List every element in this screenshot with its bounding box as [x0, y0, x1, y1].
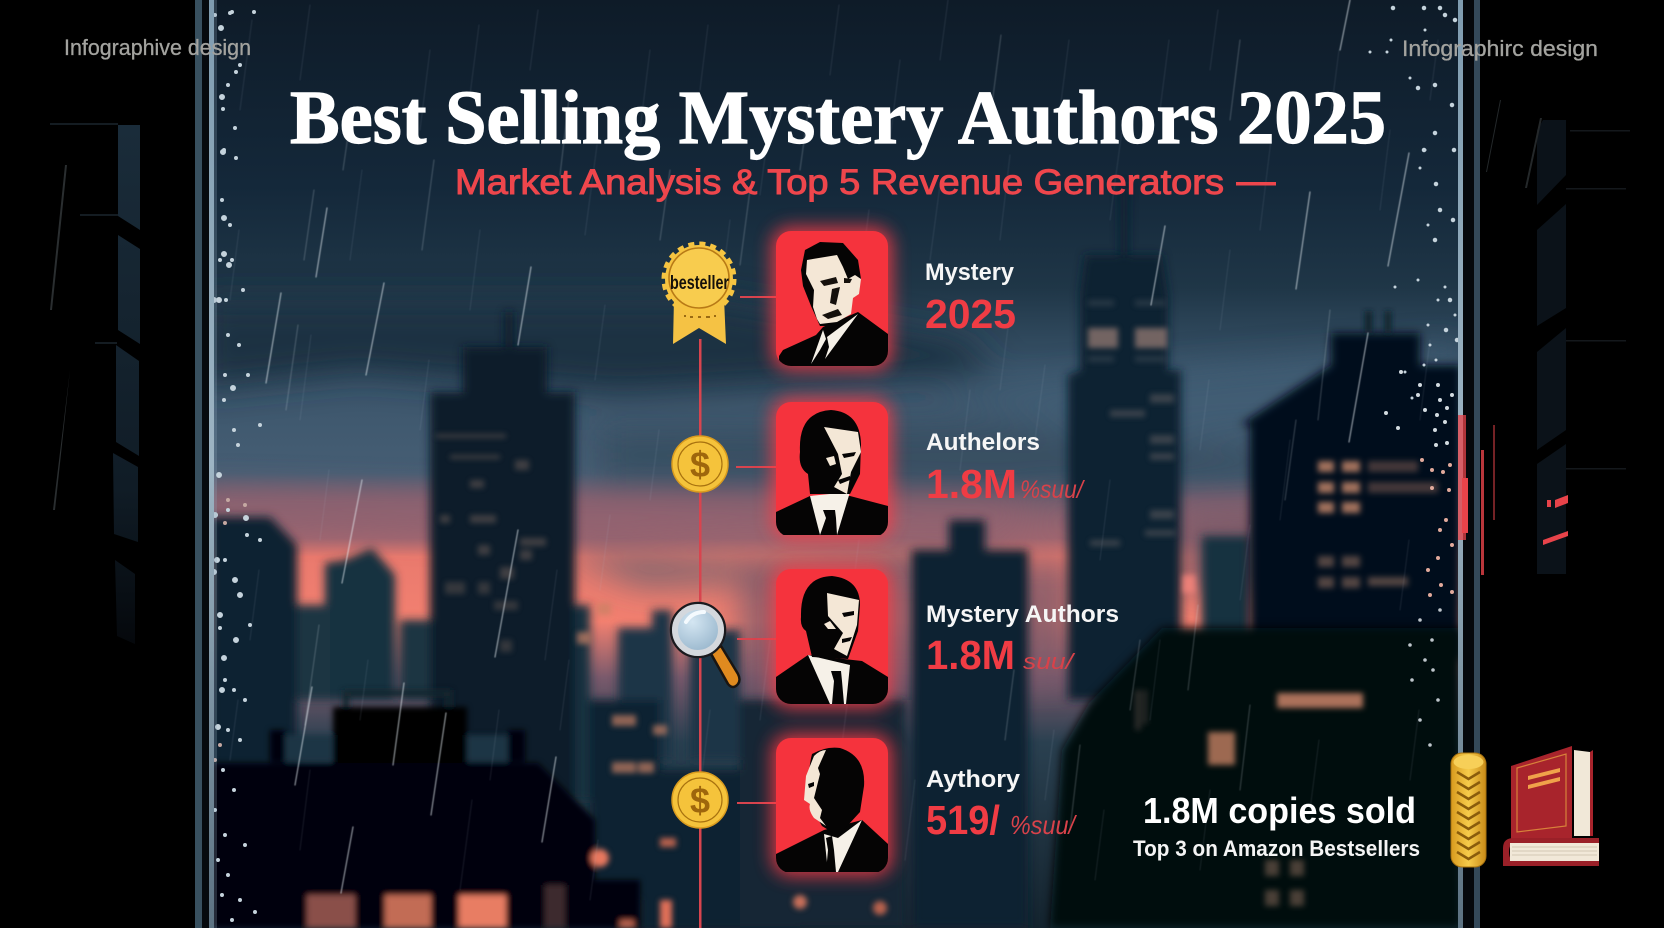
icon: bestseller badge [664, 244, 734, 344]
text: author 2: %suu/ [1020, 476, 1086, 504]
right window frame [1458, 0, 1480, 928]
window droplets [214, 8, 1457, 920]
title: Best Selling Mystery Authors 2025 [290, 76, 1386, 160]
text: author 1: Mystery [925, 259, 1015, 286]
text: author 1: 2025 [925, 291, 1016, 337]
left wall panels [50, 123, 140, 644]
icon: gold coin 1: $ [690, 444, 710, 485]
text: author 4: 519/ [926, 797, 1000, 843]
icon: gold coin 2: $ [690, 780, 710, 821]
callout: copies sold: Top 3 on Amazon Bestsellers [1133, 836, 1420, 861]
icon: book [1503, 746, 1599, 866]
icon: bestseller badge: besteller [670, 273, 729, 294]
text: author 3: Mystery Authors [926, 601, 1119, 628]
portrait 4 [776, 748, 888, 872]
portrait 3 [776, 576, 888, 704]
text: author 2: 1.8M [926, 461, 1017, 507]
text: author 2: Authelors [926, 429, 1040, 456]
red neon reflections [1458, 415, 1568, 575]
author card 2 [772, 398, 892, 539]
icon: gold coin 2 [672, 772, 728, 828]
text: author 4: %suu/ [1010, 810, 1077, 840]
text: author 2 [926, 429, 1086, 507]
author card 4 [772, 734, 892, 876]
watermark right: Infographirc design [1402, 36, 1598, 61]
icon: magnifying glass [671, 603, 740, 687]
icon: coin stack [1451, 753, 1486, 867]
timeline connector [699, 296, 776, 928]
text: author 4 [926, 766, 1077, 843]
foreground right building [1050, 628, 1461, 928]
text: author 4: Aythory [926, 766, 1021, 793]
callout: copies sold [1133, 790, 1420, 861]
right wall panels [1537, 120, 1566, 574]
text: author 3: suu/ [1023, 649, 1075, 674]
subtitle: Market Analysis & Top 5 Revenue Generators [455, 163, 1224, 202]
text: author 3 [926, 601, 1119, 678]
portrait 1 [779, 242, 888, 366]
watermark left: Infographive design [64, 35, 251, 60]
author card 1 [772, 227, 892, 370]
text: author 1 [925, 259, 1016, 337]
far buildings [210, 185, 1250, 928]
icon: gold coin 1 [672, 436, 728, 492]
clouds [200, 300, 1460, 680]
building windows [436, 300, 1195, 773]
foreground left rooftop building [209, 690, 887, 928]
text: author 3: 1.8M [926, 632, 1015, 678]
callout: copies sold: 1.8M copies sold [1143, 790, 1416, 831]
left window frame [195, 0, 217, 928]
right background building [1240, 333, 1461, 660]
rain streaks [230, 0, 1438, 900]
portrait 2 [776, 410, 888, 535]
author card 3 [772, 565, 892, 708]
